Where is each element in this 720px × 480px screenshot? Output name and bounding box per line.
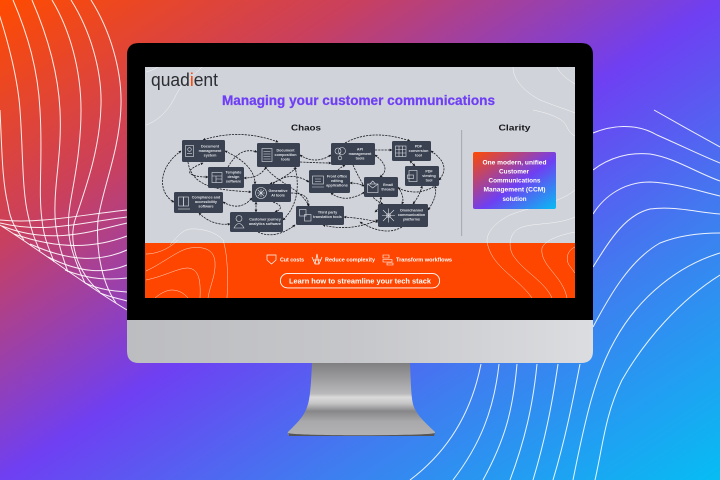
- callout: unified CCM solution: Communications: [488, 178, 541, 184]
- benefit: Cut costs: Cut costs: [280, 258, 304, 264]
- icon: stacked documents: [262, 148, 272, 162]
- tool: PDF viewing tool: tool: [426, 178, 432, 182]
- benefit: Reduce complexity: Reduce complexity: [325, 258, 375, 264]
- tool: API management tools: [331, 143, 375, 165]
- button: Learn how to streamline your tech stack: [280, 274, 440, 288]
- benefit: Cut costs: [267, 255, 304, 264]
- tool: Front office editing applications: [309, 170, 350, 193]
- divider: [460, 130, 463, 236]
- benefit: Reduce complexity: [312, 254, 375, 264]
- tool: PDF viewing tool: [405, 166, 439, 186]
- tool: Document composition tools: Document: [276, 148, 295, 152]
- tool: API management tools: tools: [356, 156, 364, 160]
- button: Learn how to streamline your tech stack: Learn how to streamline your tech stack: [289, 278, 431, 285]
- tool: PDF conversion tool: conversion: [409, 149, 429, 153]
- tool: Document composition tools: composition: [275, 153, 297, 157]
- tool: PDF viewing tool: PDF: [425, 170, 433, 174]
- tool: PDF viewing tool: viewing: [422, 174, 436, 178]
- benefit: Transform workflows: [383, 255, 452, 265]
- monitor chin: [127, 320, 593, 363]
- tool: Front office editing applications: applications: [326, 184, 348, 188]
- tool: Front office editing applications: editing: [331, 179, 343, 183]
- tool: Compliance and accessibility software: software: [198, 204, 214, 208]
- tool: Compliance and accessibility software: Compliance and: [192, 196, 221, 200]
- icon: PDF viewer: [408, 170, 417, 182]
- icon: envelope: [368, 181, 378, 192]
- tool: Omnichannel communication platforms: [378, 204, 428, 227]
- icon: AI brain: [256, 188, 266, 198]
- heading: Chaos: Chaos: [291, 122, 321, 132]
- callout: unified CCM solution: One modern, unified: [482, 160, 547, 166]
- tool: Template design software: [208, 167, 244, 188]
- monitor stand: [288, 363, 435, 436]
- quadient logo: quadient: [151, 70, 218, 90]
- tool: Generative AI tools: AI tools: [271, 194, 285, 198]
- tool: Third party translation tools: [296, 206, 344, 225]
- icon: price shield: [267, 255, 276, 264]
- tool: Third party translation tools: Third party: [318, 210, 338, 214]
- icon: customer profile: [234, 216, 244, 228]
- icon: workflow: [383, 255, 393, 265]
- tool: Front office editing applications: Front office: [327, 174, 347, 178]
- icon: complexity nodes: [312, 254, 322, 264]
- tool: Document composition tools: tools: [281, 158, 290, 162]
- callout: unified CCM solution: [473, 152, 556, 209]
- tool: Third party translation tools: translation tools: [313, 215, 342, 219]
- tool: Template design software: software: [226, 180, 241, 184]
- tool: Customer journey analytics software: [230, 212, 283, 232]
- screen background: [145, 67, 575, 244]
- tool: Generative AI tools: [252, 184, 291, 202]
- tool: API management tools: management: [349, 152, 372, 156]
- tool: Template design software: design: [228, 175, 240, 179]
- tool: Document management system: system: [204, 154, 217, 158]
- icon: translation: [300, 210, 311, 221]
- screen contour lines: [146, 67, 575, 298]
- tool: Customer journey analytics software: Customer journey: [249, 218, 282, 222]
- callout: unified CCM solution: solution: [502, 196, 527, 203]
- tool: PDF conversion tool: tool: [415, 154, 422, 158]
- title: Managing your customer communications: [222, 93, 495, 108]
- tool: Template design software: Template: [226, 170, 241, 174]
- icon: document with badge: [186, 146, 194, 156]
- icon: compliance screens: [178, 197, 190, 209]
- tool: Email threads: threads: [381, 188, 395, 192]
- icon: template layout: [212, 172, 222, 182]
- tool: Document management system: [182, 140, 225, 162]
- tool: Document management system: Document: [201, 144, 220, 148]
- tool: Email threads: [364, 177, 398, 197]
- tool: Document composition tools: [257, 143, 300, 167]
- tool: Omnichannel communication platforms: communication: [398, 213, 426, 217]
- heading: Clarity: Clarity: [498, 122, 531, 132]
- tool: PDF conversion tool: [392, 141, 431, 161]
- background contour lines: top left: [0, 0, 127, 310]
- orange footer band: [145, 243, 575, 298]
- dashed arrows between tools: [162, 134, 444, 235]
- tool: Customer journey analytics software: analytics software: [249, 222, 281, 226]
- tool: Compliance and accessibility software: accessibility: [195, 200, 218, 204]
- tool: Omnichannel communication platforms: platforms: [403, 218, 420, 222]
- tool: Omnichannel communication platforms: Omnichannel: [400, 208, 423, 212]
- tool: Compliance and accessibility software: [174, 192, 223, 213]
- icon: cloud network: [335, 148, 346, 160]
- monitor bezel: [127, 43, 593, 320]
- callout: unified CCM solution: Customer: [499, 168, 530, 176]
- tool: Generative AI tools: Generative: [268, 189, 288, 193]
- callout: unified CCM solution: Management (CCM): [484, 186, 546, 194]
- tool: Document management system: management: [199, 149, 222, 153]
- icon: omnichannel network: [382, 208, 395, 222]
- tool: API management tools: API: [357, 148, 363, 152]
- benefit: Transform workflows: Transform workflows: [396, 258, 452, 264]
- icon: desktop editing: [312, 176, 324, 187]
- tool: Email threads: Email: [383, 183, 393, 187]
- icon: PDF conversion: [396, 146, 406, 156]
- background contour lines: right: [410, 110, 720, 480]
- screen: [145, 67, 575, 298]
- tool: PDF conversion tool: PDF: [415, 144, 423, 148]
